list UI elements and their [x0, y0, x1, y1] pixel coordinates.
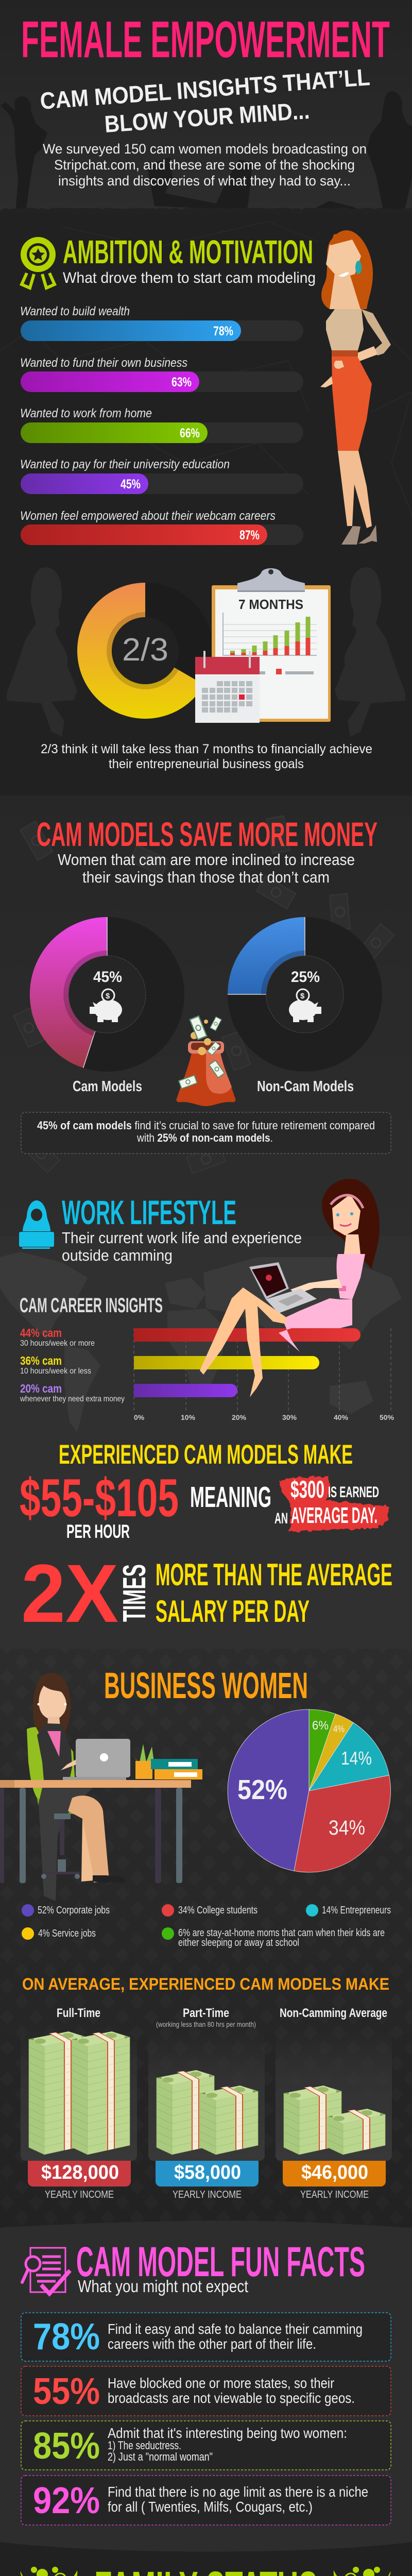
- chart: non-cam models donut 25%: [228, 917, 382, 1072]
- panel: non-camming income: [276, 2006, 392, 2200]
- legend: occupations: either sleeping or away at school: [178, 1937, 299, 1948]
- intro text: insights and discoveries of what they had to say...: [58, 173, 351, 189]
- icon: piggy bank: [90, 989, 122, 1022]
- chart: 2/3 donut: 2/3: [122, 632, 168, 668]
- chart: career insights grid: [134, 1328, 391, 1411]
- bar: build wealth: Wanted to build wealth: [20, 304, 130, 318]
- icon: piggy bank: $: [106, 992, 110, 1001]
- icon: family left: [21, 2567, 77, 2576]
- icon: family right: [334, 2567, 390, 2576]
- intro text: We surveyed 150 cam women models broadcasting on: [43, 141, 367, 157]
- panel: full-time income: Full-Time: [57, 2006, 100, 2020]
- fact: 78%: careers with the other part of their life.: [108, 2336, 316, 2352]
- chart: pie of occupations: 14%: [341, 1748, 372, 1769]
- background silhouettes: header women: [0, 91, 412, 213]
- fact: 92%: Find that there is no age limit as there is a niche: [108, 2484, 368, 2500]
- chart: career insights rows: 20%: [232, 1413, 247, 1421]
- fact: 78%: Find it easy and safe to balance their camming: [108, 2321, 363, 2337]
- subheading: save more money: Women that cam are more inclined to increase: [58, 851, 355, 869]
- chart: pie of occupations: 4%: [333, 1724, 345, 1734]
- stat: 2X times: 2X: [21, 1547, 118, 1639]
- subheading: save more money: their savings than those that don’t cam: [82, 868, 330, 886]
- donut label: non-cam models: Non-Cam Models: [257, 1078, 354, 1095]
- callout: $300 average day: IS EARNED: [328, 1484, 379, 1501]
- fact: 55%: [21, 2366, 391, 2416]
- illustration: clipboard with chart: [212, 568, 331, 722]
- fact: 85%: 2) Just a "normal woman": [108, 2450, 213, 2463]
- chart: pie of occupations: 34%: [329, 1817, 365, 1839]
- chart: non-cam models donut 25%: 25%: [291, 969, 320, 986]
- illustration: calendar: [195, 651, 260, 723]
- caption: 2/3: [41, 742, 372, 771]
- legend: occupations: 34% College students: [178, 1905, 258, 1916]
- chart: career insights rows: 36% cam: [20, 1354, 62, 1367]
- bar: work from home: Wanted to work from home: [20, 406, 152, 420]
- illustration: businesswoman standing: [320, 230, 391, 545]
- panel: ambition and motivation: [20, 230, 391, 545]
- chart: career insights rows: 0%: [134, 1413, 145, 1421]
- subheading: Their current work life and experience: [62, 1229, 302, 1247]
- text: meaning: MEANING: [190, 1481, 271, 1514]
- subheading: [62, 1229, 302, 1264]
- panel: non-camming income: Non-Camming Average: [280, 2006, 387, 2020]
- chart: career insights rows: 20% cam: [20, 1382, 62, 1395]
- chart: career insights rows: 10 hours/week or less: [20, 1367, 91, 1376]
- caption: 2/3: their entrepreneurial business goals: [109, 757, 304, 771]
- panel: full-time income: YEARLY INCOME: [45, 2189, 114, 2200]
- icon: document with magnifier and check: [22, 2248, 70, 2294]
- chart: career insights rows: whenever they need extra money: [20, 1395, 125, 1403]
- stat: hourly pay: $55-$105: [20, 1468, 179, 1528]
- fact: 92%: [21, 2476, 391, 2525]
- panel: part-time income: YEARLY INCOME: [173, 2189, 242, 2200]
- chart: pie of occupations: 6%: [312, 1719, 329, 1733]
- callout: $300 average day: AN: [274, 1510, 288, 1527]
- money stacks: [284, 2086, 385, 2155]
- callout: retirement savings: [21, 1112, 391, 1154]
- money stacks: [157, 2070, 258, 2155]
- fact: 85%: 1) The seductress.: [108, 2439, 181, 2452]
- clipboard bar chart: [223, 613, 317, 655]
- subheading: What you might not expect: [78, 2277, 248, 2296]
- panel: fun facts: [21, 2239, 391, 2525]
- bar: university: [20, 457, 303, 494]
- legend: occupations: [22, 1904, 391, 1948]
- bar: university: Wanted to pay for their university education: [20, 457, 230, 471]
- panel: family status: [21, 2561, 391, 2576]
- bar: build wealth: 78%: [213, 324, 233, 338]
- icon: piggy bank: $: [300, 992, 305, 1001]
- illustration: woman at desk: [0, 1673, 202, 1901]
- tilted subtitle: BLOW YOUR MIND...: [104, 97, 311, 138]
- bar: empowered: Women feel empowered about their webcam careers: [20, 509, 276, 523]
- chart: career insights rows: 50%: [380, 1413, 394, 1421]
- fact: 85%: Admit that it's interesting being two women:: [108, 2425, 347, 2441]
- bar: fund business: Wanted to fund their own business: [20, 356, 187, 370]
- intro text: [43, 141, 367, 189]
- callout: retirement savings: 45% of cam models find it’s crucial to save for future retirement compared: [37, 1119, 375, 1132]
- callout: $300 average day: $300: [290, 1476, 324, 1503]
- subheading: save more money: [58, 851, 355, 886]
- chart: pie of occupations: [228, 1709, 390, 1872]
- panel: part-time income: [148, 2006, 265, 2200]
- intro text: Stripchat.com, and these are some of the shocking: [54, 157, 355, 173]
- panel: work lifestyle: [19, 1193, 302, 1264]
- fact: 85%: 85%: [33, 2426, 100, 2467]
- bar: fund business: 63%: [171, 375, 192, 389]
- fact: 92%: 92%: [33, 2480, 100, 2521]
- fact: 92%: for all ( Twenties, Milfs, Cougars, etc.): [108, 2499, 313, 2515]
- fact: 55%: broadcasts are not viewable to specific geos.: [108, 2390, 355, 2406]
- background silhouettes: seated women: [7, 567, 405, 737]
- donut label: cam models: Cam Models: [73, 1078, 142, 1095]
- fact: 55%: Have blocked one or more states, so their: [108, 2375, 334, 2391]
- chart: career insights rows: 44% cam: [20, 1326, 62, 1340]
- callout: $300 average day: [274, 1476, 389, 1532]
- heading: cam career insights: CAM CAREER INSIGHTS: [20, 1294, 163, 1317]
- stat: 2X times: TIMES: [117, 1564, 152, 1622]
- background network lines: [0, 222, 412, 515]
- background: floating banknotes: [13, 816, 394, 1174]
- chart: pie of occupations: 52%: [237, 1774, 287, 1805]
- icon: piggy bank: [289, 989, 321, 1022]
- caption: 2/3: 2/3 think it will take less than 7 months to financially achieve: [41, 742, 372, 756]
- chart: cam models donut 45%: 45%: [93, 969, 122, 986]
- legend: occupations: 52% Corporate jobs: [38, 1905, 110, 1916]
- chart: career insights rows: 40%: [334, 1413, 349, 1421]
- money stacks: [29, 2031, 130, 2155]
- bar: empowered: [20, 509, 303, 545]
- fact: 55%: 55%: [33, 2371, 100, 2412]
- bar: work from home: 66%: [180, 426, 200, 440]
- chart: career insights rows: 30%: [282, 1413, 297, 1421]
- panel: full-time income: $128,000: [41, 2162, 119, 2183]
- tilted subtitle: [39, 63, 371, 138]
- fact: 78%: [21, 2313, 391, 2361]
- clipboard clip: [237, 568, 305, 592]
- panel: part-time income: (working less than 80 hrs per month): [156, 2020, 256, 2028]
- bar: fund business: [20, 356, 303, 392]
- chart: 2/3 donut: [77, 583, 213, 719]
- tilted subtitle: CAM MODEL INSIGHTS THAT’LL: [39, 63, 371, 114]
- bar: build wealth: [20, 304, 303, 341]
- panel: non-camming income: $46,000: [301, 2162, 368, 2183]
- legend: occupations: 14% Entrepreneurs: [322, 1905, 391, 1916]
- heading: WORK LIFESTYLE: [62, 1193, 236, 1231]
- panel: part-time income: $58,000: [174, 2162, 241, 2183]
- bar: empowered: 87%: [239, 528, 260, 543]
- bar: university: 45%: [121, 477, 141, 492]
- fact: 78%: 78%: [33, 2316, 100, 2358]
- legend: occupations: 4% Service jobs: [38, 1928, 96, 1939]
- chart: cam models donut 45%: [30, 917, 184, 1072]
- stat: 2X times: [21, 1547, 392, 1639]
- clipboard heading: 7 MONTHS: [238, 597, 303, 612]
- panel: part-time income: Part-Time: [183, 2006, 229, 2020]
- icon: award badge: [21, 237, 56, 288]
- stat: hourly pay: [20, 1468, 179, 1542]
- panel: non-camming income: YEARLY INCOME: [300, 2189, 369, 2200]
- chart: career insights rows: 30 hours/week or more: [20, 1339, 95, 1348]
- chart: career insights rows: [20, 1326, 394, 1421]
- subheading: What drove them to start cam modeling: [63, 269, 316, 286]
- illustration: money bag: [177, 1016, 235, 1106]
- stat: hourly pay: PER HOUR: [66, 1521, 130, 1542]
- chart: career insights rows: 10%: [181, 1413, 196, 1421]
- callout: retirement savings: with 25% of non-cam models.: [136, 1131, 273, 1144]
- background: world map: [0, 1252, 402, 1432]
- icon: woman at laptop: [19, 1200, 54, 1249]
- panel: full-time income: [21, 2006, 137, 2200]
- subheading: outside camming: [62, 1246, 173, 1264]
- fact: 85%: [21, 2421, 391, 2470]
- illustration: woman seated with laptop: [200, 1179, 380, 1397]
- bar: work from home: [20, 406, 303, 443]
